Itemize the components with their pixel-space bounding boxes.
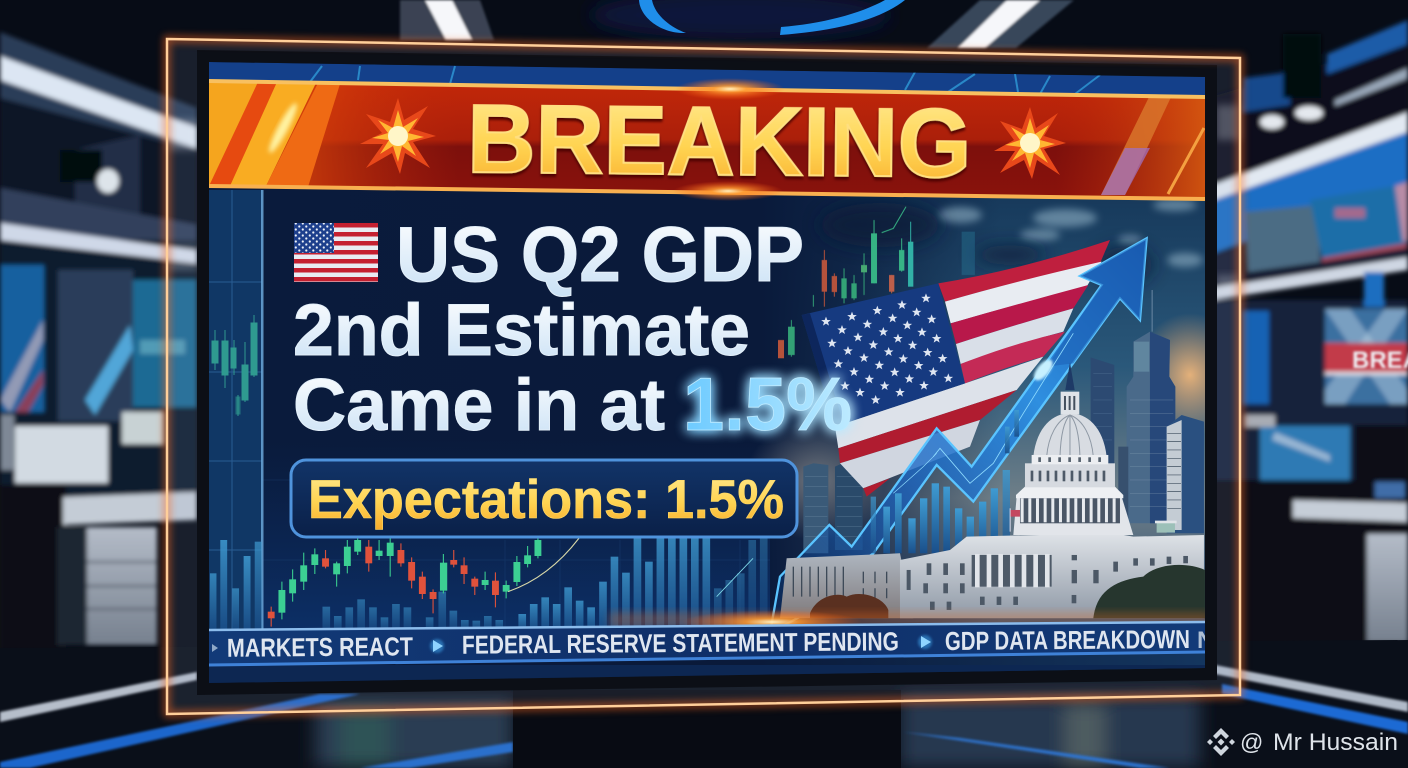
heading: BREAKING: BREAKING [467, 84, 972, 198]
capitol: dome [1013, 363, 1133, 535]
monitor stand [513, 690, 901, 768]
capitol: main block [900, 533, 1204, 618]
skyline buildings [803, 290, 1204, 553]
monitor bezel [197, 50, 1217, 695]
expectations box [291, 460, 797, 537]
US Capitol [780, 363, 1205, 618]
left side of studio [0, 32, 197, 675]
ticker text: N [1197, 627, 1214, 654]
flag canton [802, 283, 965, 427]
lower candlesticks [268, 535, 753, 627]
top blue strip [209, 62, 1205, 95]
capitol: small flag [1010, 508, 1020, 532]
chart grid [209, 190, 790, 630]
screen base [209, 62, 1205, 685]
banner flares [673, 78, 785, 201]
ticker markers [212, 635, 932, 653]
capitol: left wing [780, 553, 913, 618]
banner left stripes [209, 81, 340, 187]
right side of studio [1200, 20, 1408, 650]
headline: Came in at [293, 365, 665, 446]
ticker text: FEDERAL RESERVE STATEMENT PENDING [462, 626, 899, 660]
screen [209, 62, 1245, 685]
flag stars [821, 293, 953, 404]
expectations text: Expectations: 1.5% [308, 468, 784, 530]
floor [0, 640, 1408, 768]
left faint candlesticks [212, 315, 257, 416]
headline: US Q2 GDP [396, 210, 804, 298]
blue arcs [639, 0, 686, 33]
ticker text: GDP DATA BREAKDOWN [945, 624, 1190, 656]
rising arrow [770, 238, 1147, 633]
building: mid tower [1091, 357, 1114, 467]
glass frame tint [167, 39, 1240, 714]
sky and clouds [756, 198, 1205, 623]
volume bars [210, 537, 768, 630]
breaking banner [209, 78, 1205, 201]
watermark [1207, 728, 1398, 756]
American flag [802, 240, 1110, 497]
ticker bar [209, 622, 1214, 665]
banner borders [209, 81, 1205, 97]
ticker text [228, 630, 1205, 657]
chart bars by the arrow [871, 410, 1019, 553]
icon: right starburst [994, 107, 1066, 179]
vertical axis line [261, 190, 264, 630]
headline [293, 210, 804, 446]
icon: diamond logo [1207, 728, 1235, 756]
building: left towers [803, 461, 863, 553]
upper candlesticks [778, 207, 975, 358]
trees [810, 565, 1205, 618]
building: right block [1167, 415, 1204, 533]
headline: 2nd Estimate [293, 290, 750, 371]
icon: small US flag [294, 223, 378, 282]
capitol: right cupola [1155, 521, 1177, 533]
ceiling [400, 0, 1074, 48]
building: tall tower [1127, 290, 1175, 523]
headline value: 1.5%: 1.5% [683, 362, 852, 446]
icon: left starburst [360, 98, 436, 174]
flag stripes [835, 240, 1110, 497]
orange glowing frame [167, 39, 1240, 714]
watermark: @ [1240, 729, 1263, 755]
watermark: Mr Hussain [1273, 729, 1398, 756]
ticker text: MARKETS REACT [227, 631, 413, 663]
banner right stripes [1101, 95, 1204, 195]
bottom flare [605, 608, 1205, 626]
